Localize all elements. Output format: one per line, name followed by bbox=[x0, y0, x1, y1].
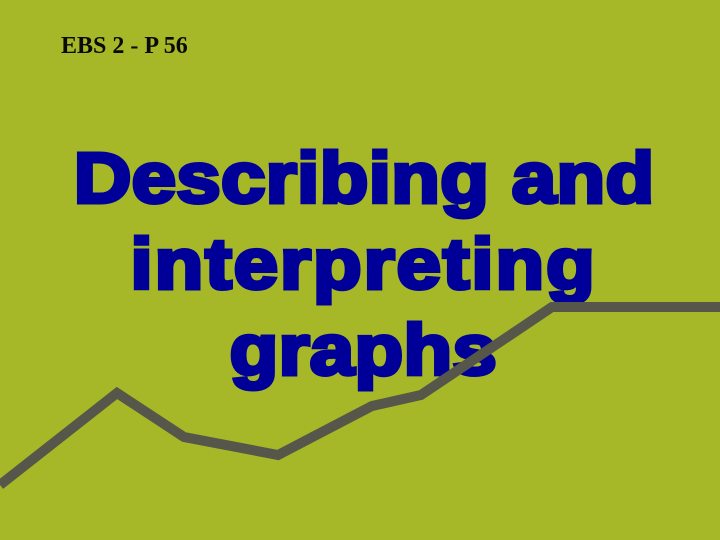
title line 1: Describing and bbox=[74, 138, 654, 218]
title bbox=[74, 138, 654, 390]
page reference: EBS 2 - P 56 bbox=[61, 33, 188, 59]
title line 3: graphs bbox=[230, 310, 497, 390]
title line 2: interpreting bbox=[130, 224, 595, 304]
line graph arrow bbox=[0, 307, 720, 485]
